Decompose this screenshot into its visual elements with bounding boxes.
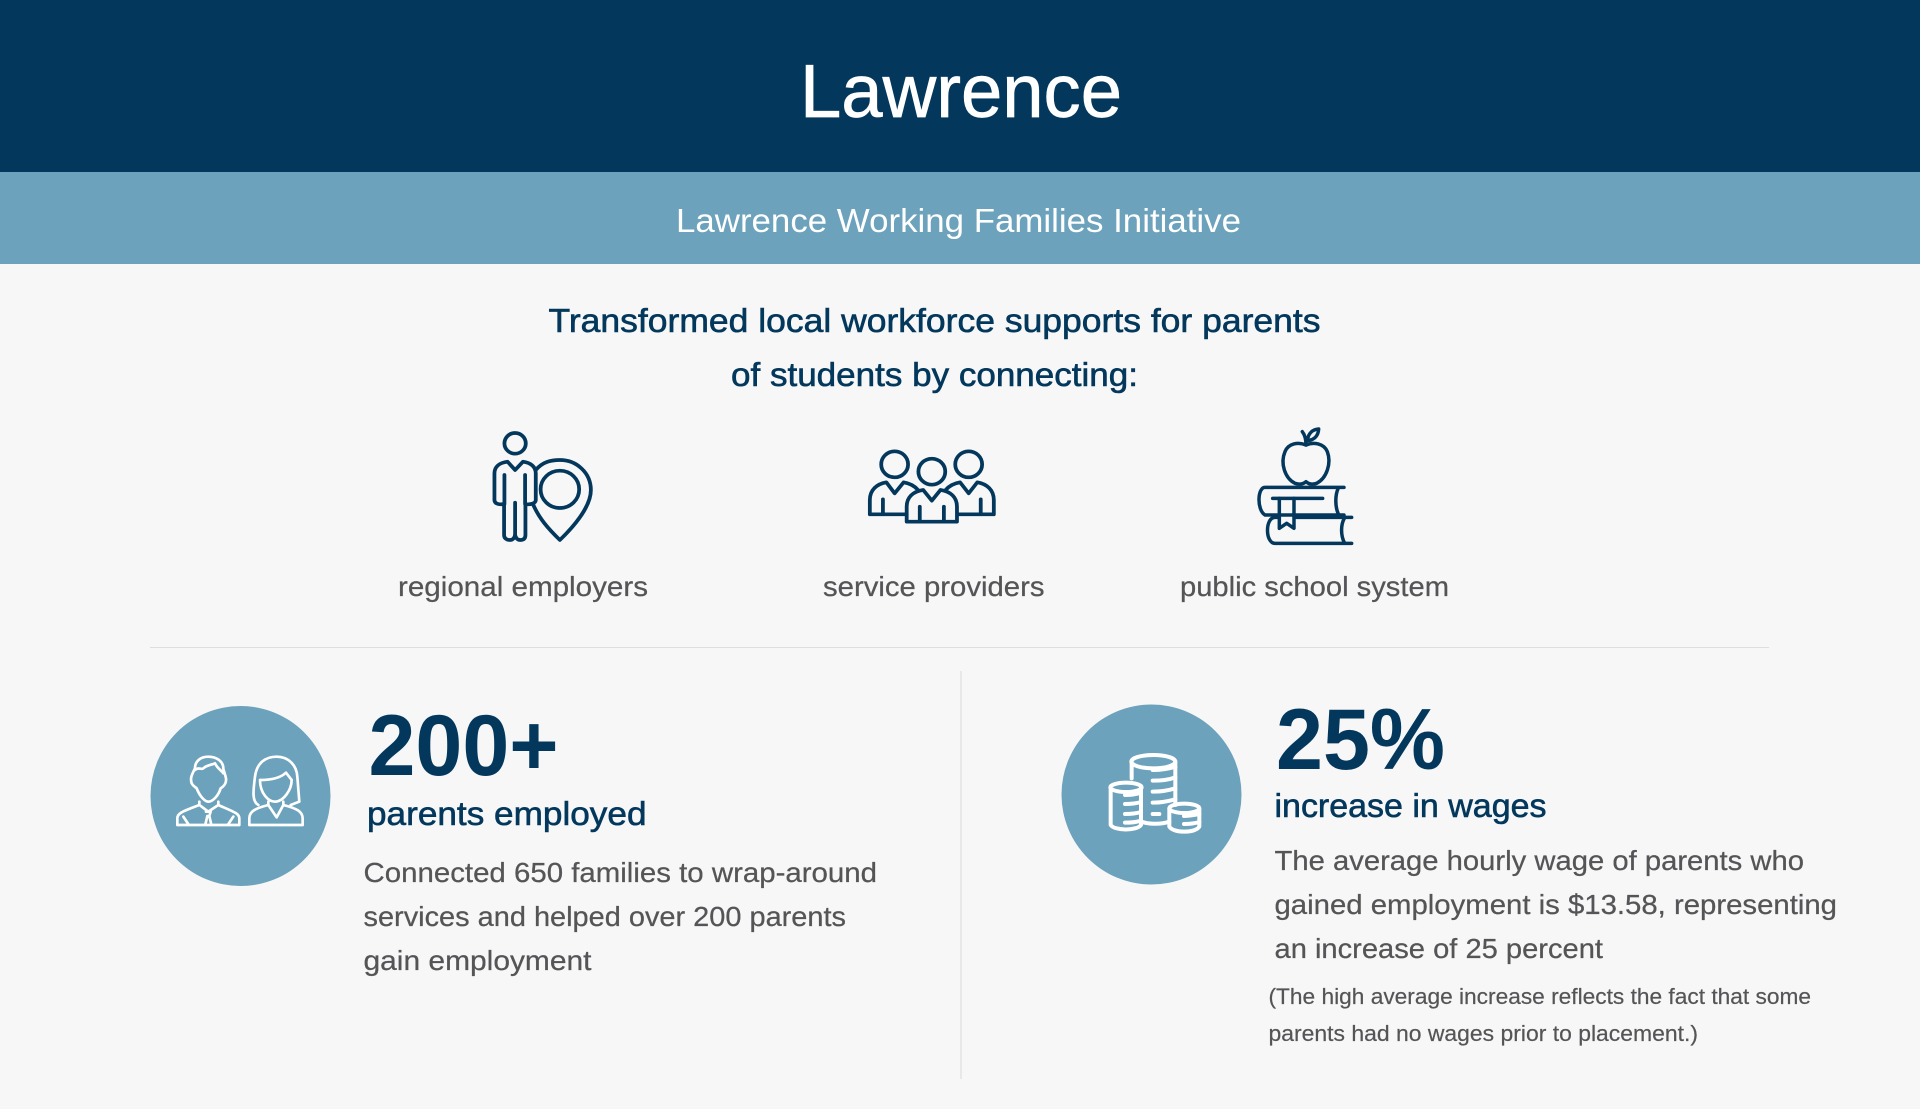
description: families connected: Connected 650 families to wrap-around [364, 857, 877, 888]
stat: 25%: 25% [1276, 692, 1445, 788]
description: families connected [364, 857, 877, 976]
stat label: increase in wages: increase in wages [1274, 787, 1546, 824]
description: average hourly wage: gained employment is $13.58, representing [1274, 889, 1837, 920]
icon: coin stacks in circle [1062, 704, 1242, 884]
icon: person with location pin [494, 433, 591, 540]
icon: group of three people [870, 451, 994, 522]
label: service providers: service providers [823, 571, 1044, 602]
icon: man and woman in circle [150, 706, 330, 886]
description: average hourly wage [1274, 845, 1837, 964]
description: average hourly wage: The average hourly wage of parents who [1274, 845, 1804, 876]
header banner [0, 0, 1920, 172]
description: families connected: gain employment [364, 945, 592, 976]
footnote: parents had no wages prior to placement.) [1268, 1021, 1698, 1046]
panel: wage increase [1062, 692, 1837, 1046]
icon: apple on books [1259, 429, 1352, 543]
subtitle band [0, 172, 1920, 264]
title: Lawrence [800, 49, 1122, 133]
panel: parents employed [150, 698, 877, 976]
heading: transformed workforce supports: Transformed local workforce supports for parents [548, 302, 1320, 339]
subtitle: Lawrence Working Families Initiative [676, 202, 1241, 239]
heading: transformed workforce supports [548, 302, 1320, 393]
description: families connected: services and helped over 200 parents [364, 901, 846, 932]
label: regional employers: regional employers [398, 571, 648, 602]
footnote: (The high average increase reflects the fact that some [1268, 984, 1811, 1009]
footnote [1268, 984, 1811, 1046]
heading: transformed workforce supports: of students by connecting: [731, 356, 1138, 393]
label: public school system: public school system [1180, 571, 1449, 602]
stat label: parents employed: parents employed [367, 795, 646, 832]
stat: 200+: 200+ [368, 698, 558, 794]
description: average hourly wage: an increase of 25 percent [1274, 933, 1603, 964]
